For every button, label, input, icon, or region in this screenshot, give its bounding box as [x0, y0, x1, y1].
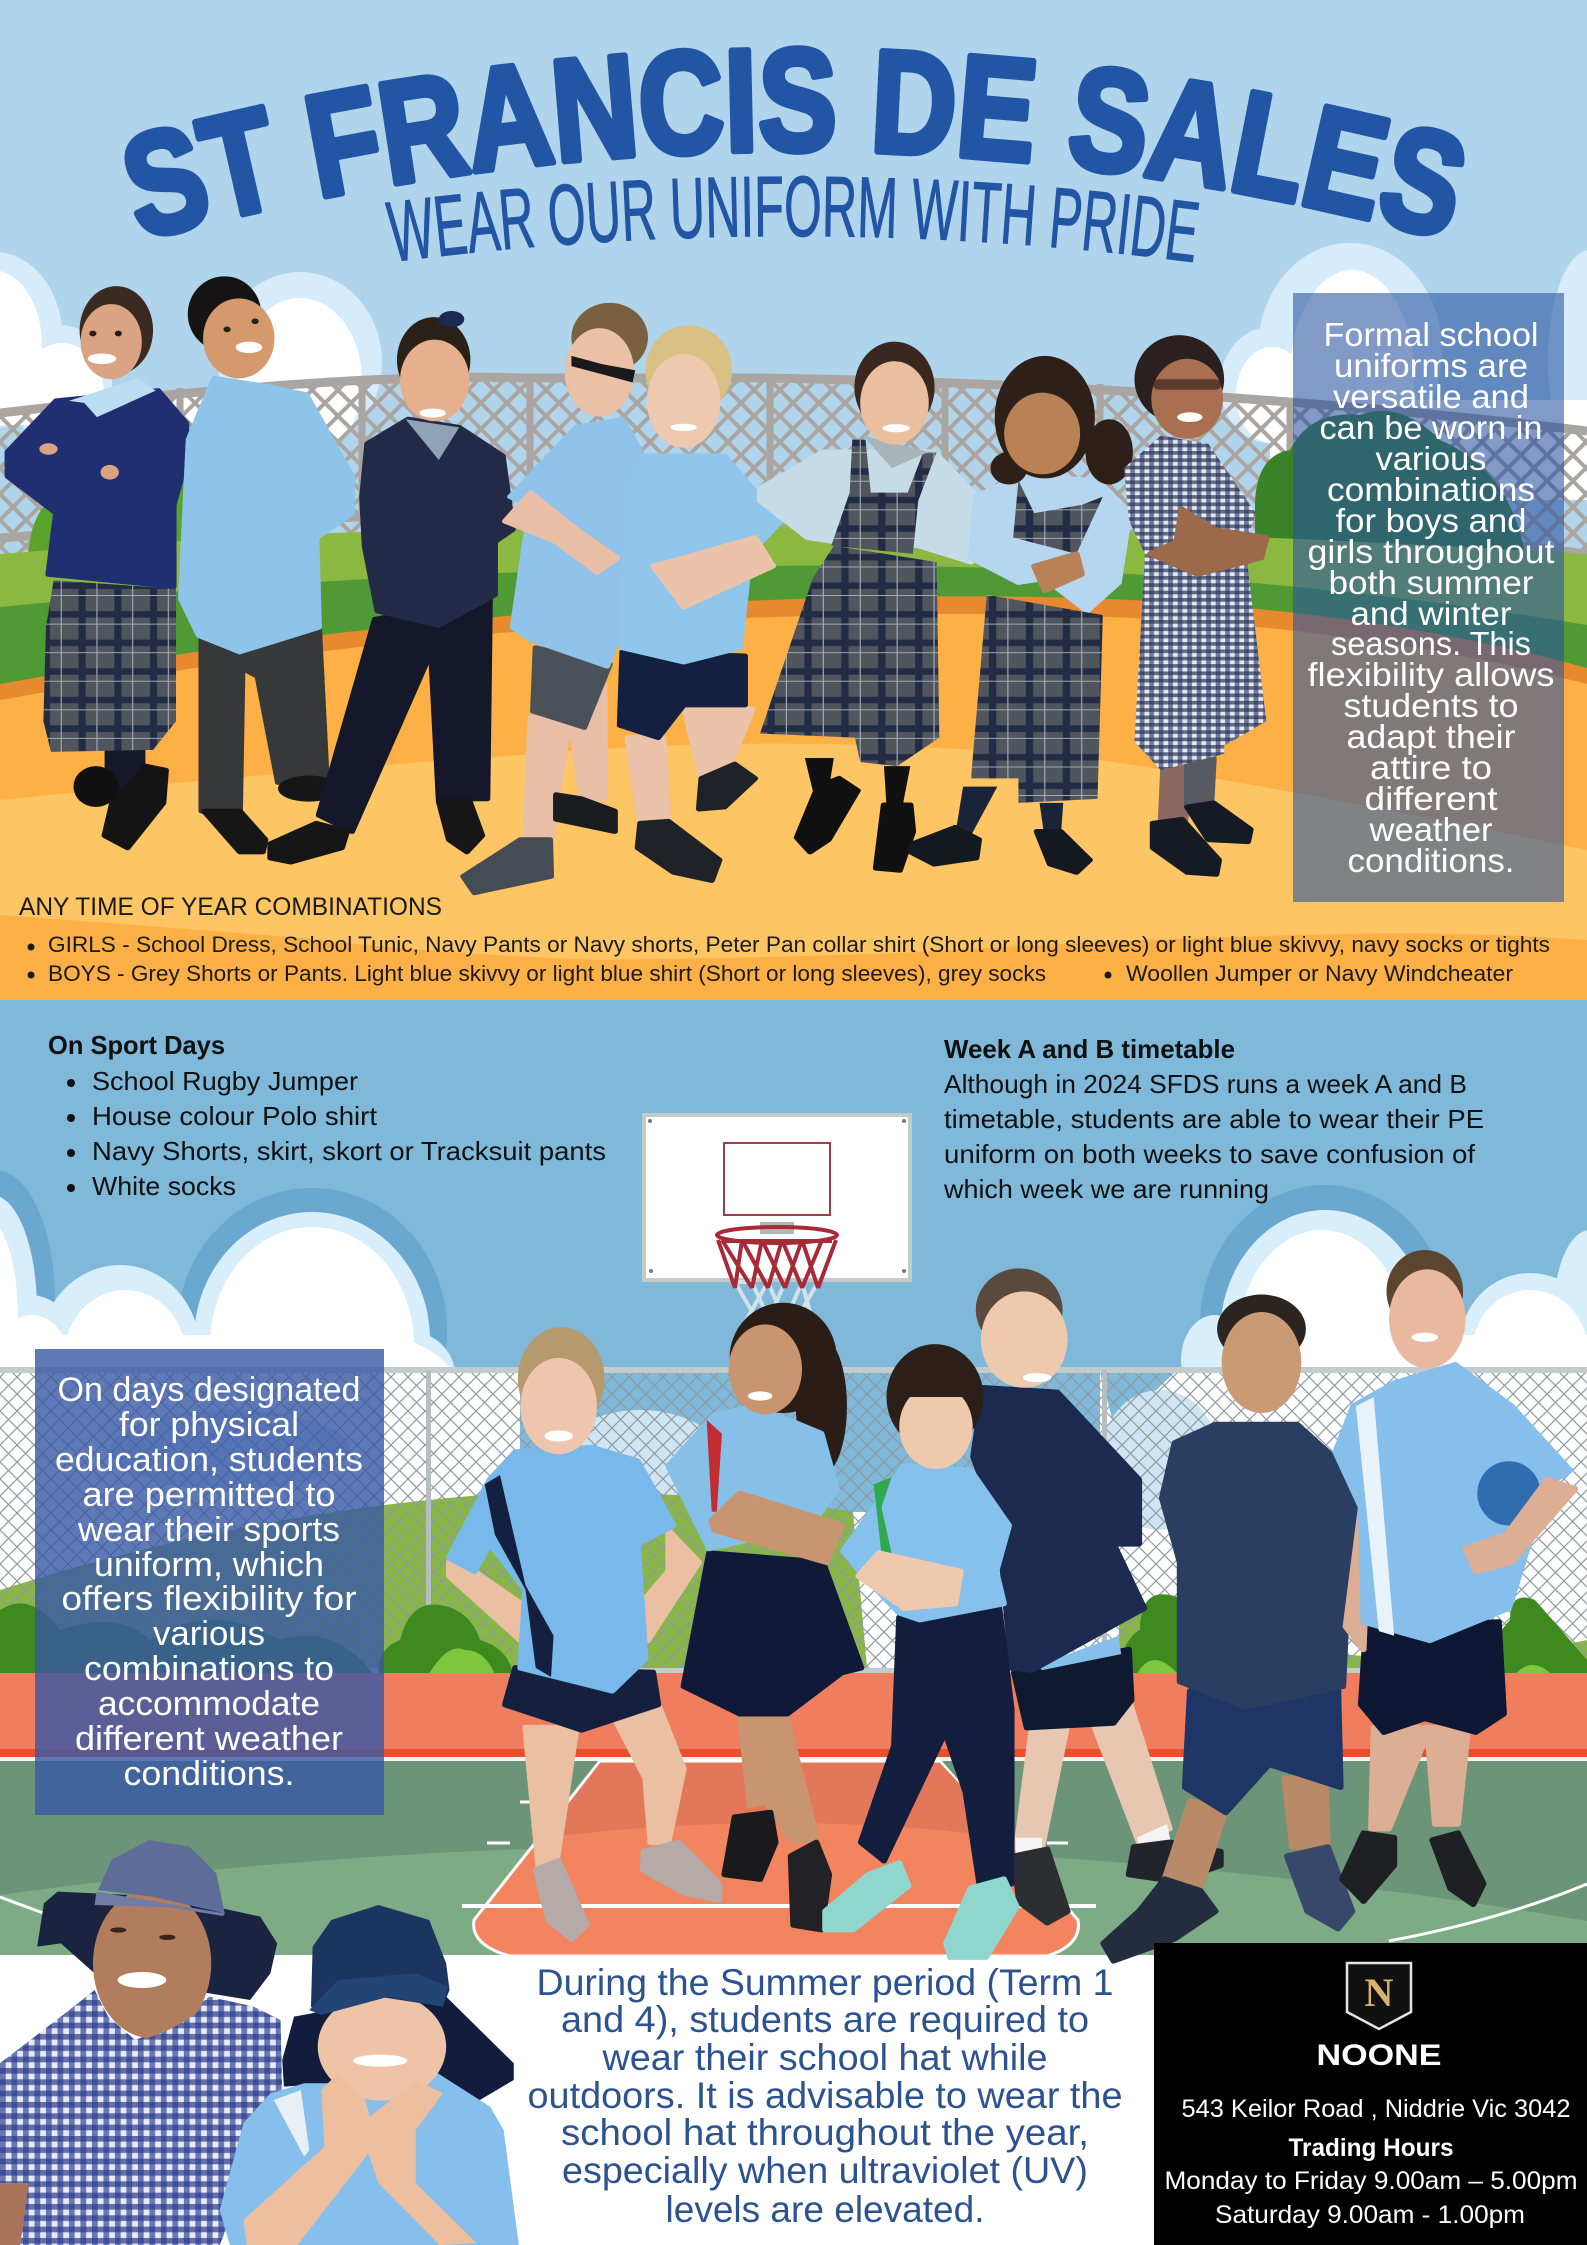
callout: formal uniforms: conditions.	[1348, 842, 1514, 879]
callout: formal uniforms: uniforms are	[1334, 347, 1528, 384]
group: sports uniform students left	[449, 1303, 861, 1939]
callout: sports uniform: combinations to	[84, 1650, 334, 1688]
green hills, sports	[0, 1493, 1587, 1690]
panel: sports background scene	[0, 1000, 1587, 1956]
student 1: navy jumper and plaid skirt	[8, 286, 186, 848]
callout: formal uniforms: both summer	[1328, 564, 1534, 601]
panel: Noone store details	[1154, 1943, 1587, 2245]
student 4: glasses and grey shorts	[463, 303, 648, 893]
address and trading hours: Saturday 9.00am - 1.00pm	[1215, 2201, 1525, 2229]
callout: sports uniform: various	[153, 1615, 265, 1653]
callout: formal uniforms: girls throughout	[1308, 533, 1554, 570]
sky behind fence patches	[520, 1372, 1175, 1512]
text block: summer hat policy: During the Summer period (Term 1	[536, 1962, 1114, 2003]
logo wordmark: NOONE	[1316, 2039, 1442, 2072]
fence, top	[0, 370, 1587, 560]
text block: summer hat policy: levels are elevated.	[666, 2189, 984, 2230]
chain-link fence, sports	[0, 1367, 1587, 1673]
callout: formal uniforms	[1293, 293, 1564, 902]
green grass	[0, 525, 1587, 720]
title: ST FRANCIS DE SALES	[124, 45, 1464, 236]
clouds behind fence, top	[0, 243, 1587, 500]
text block: any time of year combinations	[19, 893, 1550, 986]
clouds, sports	[0, 1170, 1587, 1472]
callout: formal uniforms: seasons. This	[1331, 625, 1531, 662]
text block: summer hat policy: school hat throughout the year,	[561, 2112, 1089, 2153]
group: formal uniform students left	[8, 276, 781, 893]
student 12: navy jacket and black shorts	[973, 1268, 1221, 1923]
text block: summer hat policy: outdoors. It is advisable to wear the	[528, 2075, 1122, 2116]
icon: Noone shield logo: N	[1365, 1970, 1394, 2015]
text block: any time of year combinations: Woollen Jumper or Navy Windcheater	[1126, 961, 1513, 986]
address and trading hours: Trading Hours	[1288, 2134, 1454, 2162]
callout: formal uniforms: for boys and	[1336, 502, 1526, 539]
text block: week A and B timetable: uniform on both weeks to save confusion of	[944, 1139, 1476, 1169]
subtitle: WEAR OUR UNIFORM WITH PRIDE	[384, 176, 1200, 262]
student 11: navy track pants and green strap	[825, 1344, 1017, 1957]
student 14: polo with white stripe and rugby ball	[1335, 1250, 1575, 1904]
basketball backboard and hoop	[644, 1115, 910, 1322]
text block: week A and B timetable	[943, 1034, 1484, 1204]
callout: sports uniform: are permitted to	[82, 1476, 336, 1514]
student 3: navy jumper and black pants	[270, 311, 513, 862]
callout: sports uniform: accommodate	[98, 1685, 320, 1723]
callout: sports uniform: education, students	[55, 1441, 363, 1479]
student 7: tunic and pale shirt with pigtails	[910, 356, 1133, 872]
court surface	[0, 1761, 1587, 1956]
address and trading hours	[1164, 2095, 1578, 2229]
text block: any time of year combinations: GIRLS - School Dress, School Tunic, Navy Pants or Navy shorts, Peter Pan collar shirt (Short or long sleeves) or light blue skivvy, navy socks or tights	[48, 932, 1550, 957]
text block: any time of year combinations: ANY TIME OF YEAR COMBINATIONS	[19, 893, 442, 921]
text block: week A and B timetable: which week we are running	[943, 1174, 1269, 1204]
icon: Noone shield logo	[1347, 1963, 1411, 2029]
callout: sports uniform: On days designated	[58, 1371, 360, 1409]
student 9: polo with navy stripe	[449, 1327, 719, 1939]
callout: formal uniforms: different	[1364, 780, 1498, 817]
text block: on sport days: White socks	[92, 1171, 236, 1201]
bushes, top	[28, 411, 1525, 580]
student 2: light blue skivvy and grey pants	[181, 276, 352, 852]
group: sports uniform students right	[825, 1250, 1575, 1961]
panel: top background scene	[0, 0, 1587, 1000]
text block: summer hat policy	[528, 1962, 1122, 2230]
student 13: navy polo jumper	[1103, 1295, 1357, 1961]
subtitle	[384, 176, 1200, 262]
callout: sports uniform: conditions.	[124, 1755, 294, 1793]
group: formal uniform students right	[760, 335, 1266, 874]
text block: on sport days: Navy Shorts, skirt, skort or Tracksuit pants	[92, 1136, 606, 1166]
callout: sports uniform: offers flexibility for	[62, 1580, 356, 1618]
callout: sports uniform: wear their sports	[77, 1511, 340, 1549]
group: students in school hats	[0, 1840, 519, 2245]
student 5: blonde hair and navy shorts	[620, 325, 781, 880]
white bottom strip	[0, 1955, 1154, 2245]
text block: week A and B timetable: Week A and B timetable	[944, 1034, 1235, 1064]
callout: formal uniforms: combinations	[1327, 471, 1535, 508]
text block: week A and B timetable: Although in 2024 SFDS runs a week A and B	[944, 1069, 1467, 1099]
callout: formal uniforms: students to	[1344, 687, 1518, 724]
text block: on sport days: House colour Polo shirt	[92, 1101, 378, 1131]
callout: formal uniforms: adapt their	[1346, 718, 1516, 755]
student 10: navy skirt and ponytail	[668, 1303, 861, 1930]
bushes, sports	[0, 1594, 1587, 1690]
callout: sports uniform: uniform, which	[94, 1546, 324, 1584]
text block: on sport days: School Rugby Jumper	[92, 1066, 358, 1096]
callout: formal uniforms: versatile and	[1333, 378, 1529, 415]
callout: formal uniforms: weather	[1368, 811, 1493, 848]
text block: summer hat policy: especially when ultraviolet (UV)	[562, 2150, 1088, 2191]
callout: formal uniforms: and winter	[1350, 595, 1512, 632]
student in navy legionnaire cap	[220, 1905, 519, 2245]
text block: summer hat policy: and 4), students are required to	[561, 1999, 1089, 2040]
callout: formal uniforms: flexibility allows	[1308, 656, 1554, 693]
student in bucket hat and gingham dress	[0, 1840, 282, 2245]
text block: week A and B timetable: timetable, students are able to wear their PE	[944, 1104, 1484, 1134]
callout: formal uniforms: Formal school	[1324, 316, 1538, 353]
student 8: gingham dress and glasses	[1124, 335, 1266, 874]
orange ground	[0, 596, 1587, 1000]
text block: summer hat policy: wear their school hat while	[601, 2037, 1048, 2078]
callout: sports uniform: different weather	[75, 1720, 343, 1758]
student 6: tunic and grey skivvy	[760, 342, 982, 870]
callout: formal uniforms: can be worn in	[1320, 409, 1542, 446]
address and trading hours: 543 Keilor Road , Niddrie Vic 3042	[1182, 2095, 1570, 2123]
text block: any time of year combinations: BOYS - Grey Shorts or Pants. Light blue skivvy or light blue shirt (Short or long sleeves), grey socks	[48, 961, 1046, 986]
callout: formal uniforms: attire to	[1370, 749, 1492, 786]
callout: formal uniforms: various	[1376, 440, 1486, 477]
text block: on sport days: On Sport Days	[48, 1030, 225, 1060]
callout: sports uniform	[35, 1349, 384, 1815]
running track	[0, 1673, 1587, 1761]
address and trading hours: Monday to Friday 9.00am – 5.00pm	[1164, 2167, 1578, 2195]
text block: on sport days	[48, 1030, 606, 1201]
callout: sports uniform: for physical	[119, 1406, 299, 1444]
